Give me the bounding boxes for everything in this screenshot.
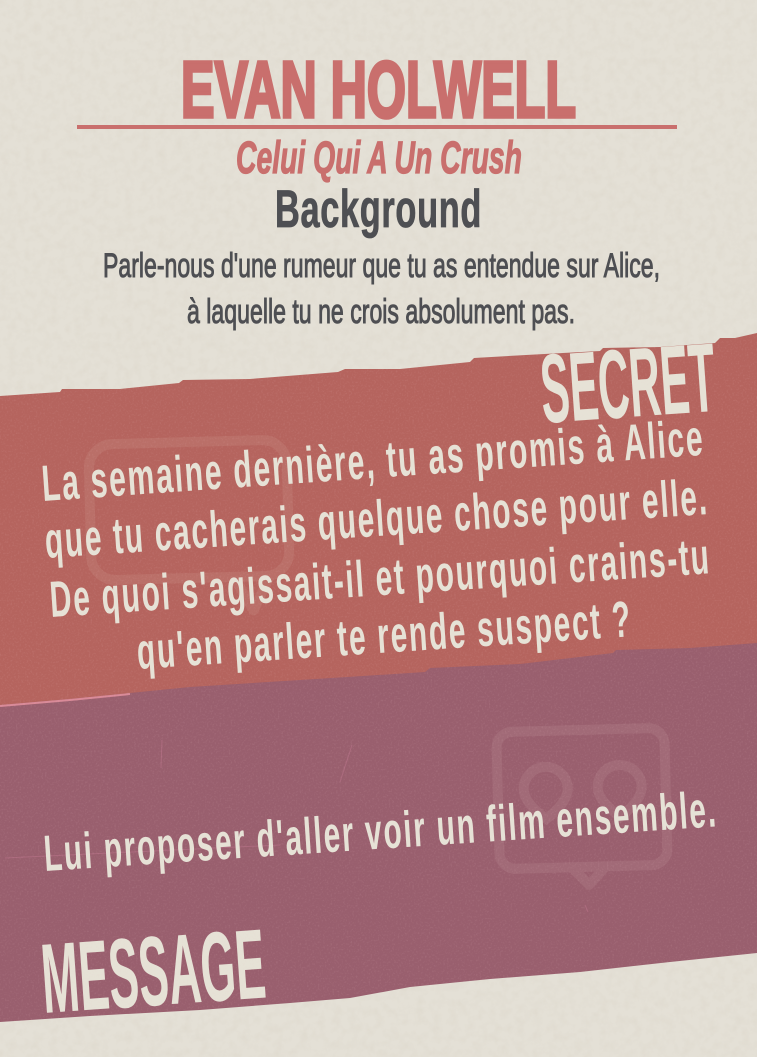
icon: speech bubble with eyes (496, 728, 668, 887)
heading: background: Background (275, 180, 482, 239)
background question (103, 247, 660, 331)
purple torn band (0, 643, 757, 1022)
panel: message: MESSAGE (38, 908, 269, 1034)
background question: à laquelle tu ne crois absolument pas. (187, 293, 575, 331)
secret question (40, 409, 712, 680)
icon: speech bubble (88, 439, 291, 615)
panel: secret (0, 322, 757, 720)
panel: message (0, 643, 757, 1034)
band grain texture (0, 338, 757, 1021)
red torn band (0, 333, 757, 720)
title rule (77, 125, 677, 129)
subtitle: Celui Qui A Un Crush (236, 132, 522, 183)
pink torn edge (0, 694, 130, 706)
scratches (5, 740, 588, 912)
